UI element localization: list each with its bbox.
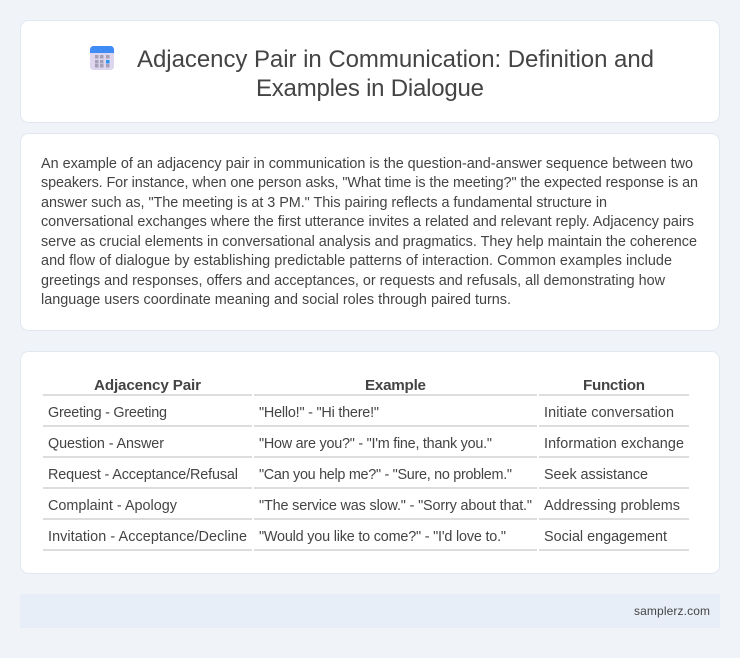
text block: paragraph: language users coordinate meaning and social roles through paired turns. (41, 292, 511, 308)
table header: Function (583, 377, 645, 394)
table row: greeting: Initiate conversation (544, 405, 674, 421)
table row: question (48, 436, 684, 452)
text block: paragraph: serve as crucial elements in conversational analysis and pragmatics. They help maintain the coherence (41, 234, 697, 250)
table row: question: "How are you?" - "I'm fine, thank you." (259, 436, 492, 452)
table header: Example (365, 377, 426, 394)
table row: request: "Can you help me?" - "Sure, no problem." (259, 467, 512, 483)
table row: invitation: Invitation - Acceptance/Decline (48, 529, 247, 545)
title: Adjacency Pair in Communication: Definition and (137, 46, 654, 73)
text block: paragraph: answer such as, "The meeting is at 3 PM." This pairing reflects a fundamental structure in (41, 195, 607, 211)
text block: paragraph: An example of an adjacency pair in communication is the question-and-answer sequence between two (41, 156, 693, 172)
title (137, 46, 654, 102)
text block: paragraph: greetings and responses, offers and acceptances, or requests and refusals, all demonstrating how (41, 273, 666, 289)
footer: samplerz.com (634, 604, 710, 618)
table row: question: Question - Answer (48, 436, 164, 452)
table row: request: Seek assistance (544, 467, 648, 483)
icon: calendar (90, 46, 114, 70)
footer (20, 594, 720, 628)
panel: title card (20, 20, 720, 122)
table row: invitation: "Would you like to come?" - "I'd love to." (259, 529, 506, 545)
table row: greeting: Greeting - Greeting (48, 405, 167, 421)
table header (94, 377, 645, 394)
text block: paragraph: and flow of dialogue by establishing predictable patterns of interaction. Common examples include (41, 253, 672, 269)
table row: complaint: "The service was slow." - "Sorry about that." (259, 498, 532, 514)
table row: request: Request - Acceptance/Refusal (48, 467, 238, 483)
table row: greeting (48, 405, 674, 421)
panel: table card (20, 352, 720, 574)
panel: description (20, 134, 720, 330)
table row: invitation: Social engagement (544, 529, 667, 545)
table row: complaint (48, 498, 680, 514)
title: Examples in Dialogue (256, 75, 484, 102)
table row: invitation (48, 529, 667, 545)
text block: paragraph: conversational exchanges where the first utterance invites a related and relevant reply. Adjacency pairs (41, 214, 694, 230)
table header: Adjacency Pair (94, 377, 201, 394)
text block: paragraph (41, 156, 698, 308)
text block: paragraph: speakers. For instance, when one person asks, "What time is the meeting?" the expected response is an (41, 175, 698, 191)
table row: request (48, 467, 648, 483)
table row: complaint: Complaint - Apology (48, 498, 178, 514)
table row: question: Information exchange (544, 436, 684, 452)
table row: complaint: Addressing problems (544, 498, 680, 514)
table row: greeting: "Hello!" - "Hi there!" (259, 405, 379, 421)
